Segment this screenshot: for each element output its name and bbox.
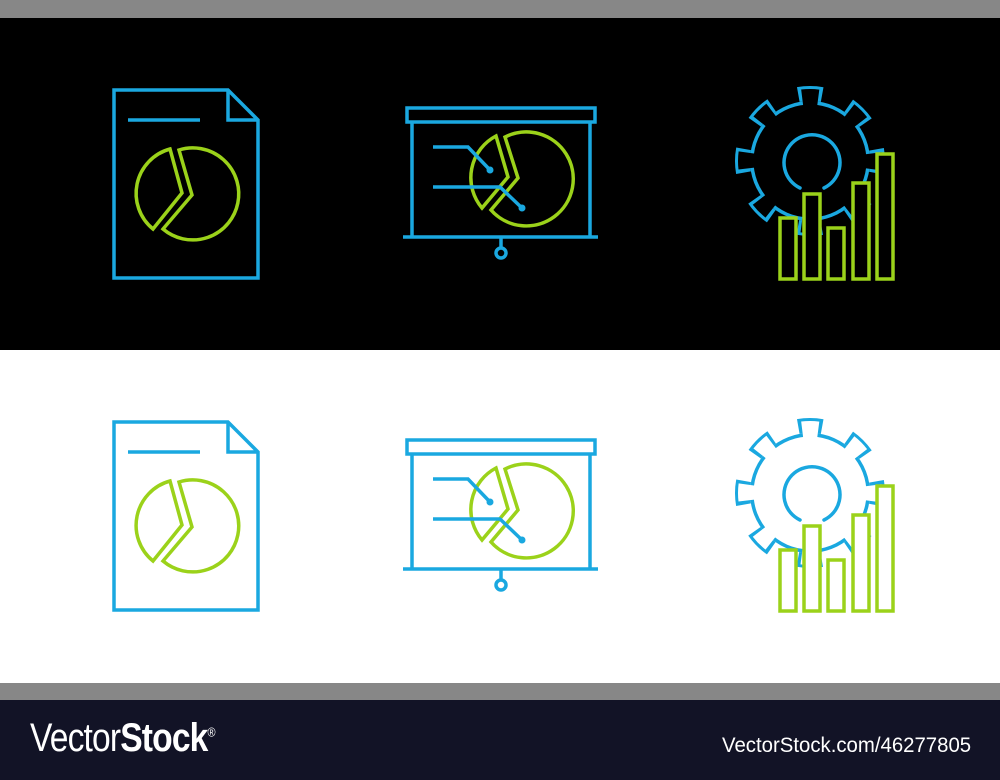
top gray bar [0, 0, 1000, 18]
bottom gray bar [0, 683, 1000, 700]
icon row: dark [114, 83, 893, 279]
icon row: light [114, 415, 893, 611]
icon: presentation board (light) [403, 440, 598, 590]
footer url: VectorStock.com/46277805 [722, 734, 971, 757]
icon: document with pie chart [114, 90, 258, 278]
footer [0, 700, 1000, 780]
icon: presentation board with pie chart [403, 108, 598, 258]
panel: dark icon row [0, 18, 1000, 350]
icon: gear with bar chart [732, 83, 893, 279]
panel: light icon row [0, 350, 1000, 683]
icon: gear with bar chart (light) [732, 415, 893, 611]
icon: document with pie chart (light) [114, 422, 258, 610]
footer logo: VectorStock® [30, 716, 215, 760]
